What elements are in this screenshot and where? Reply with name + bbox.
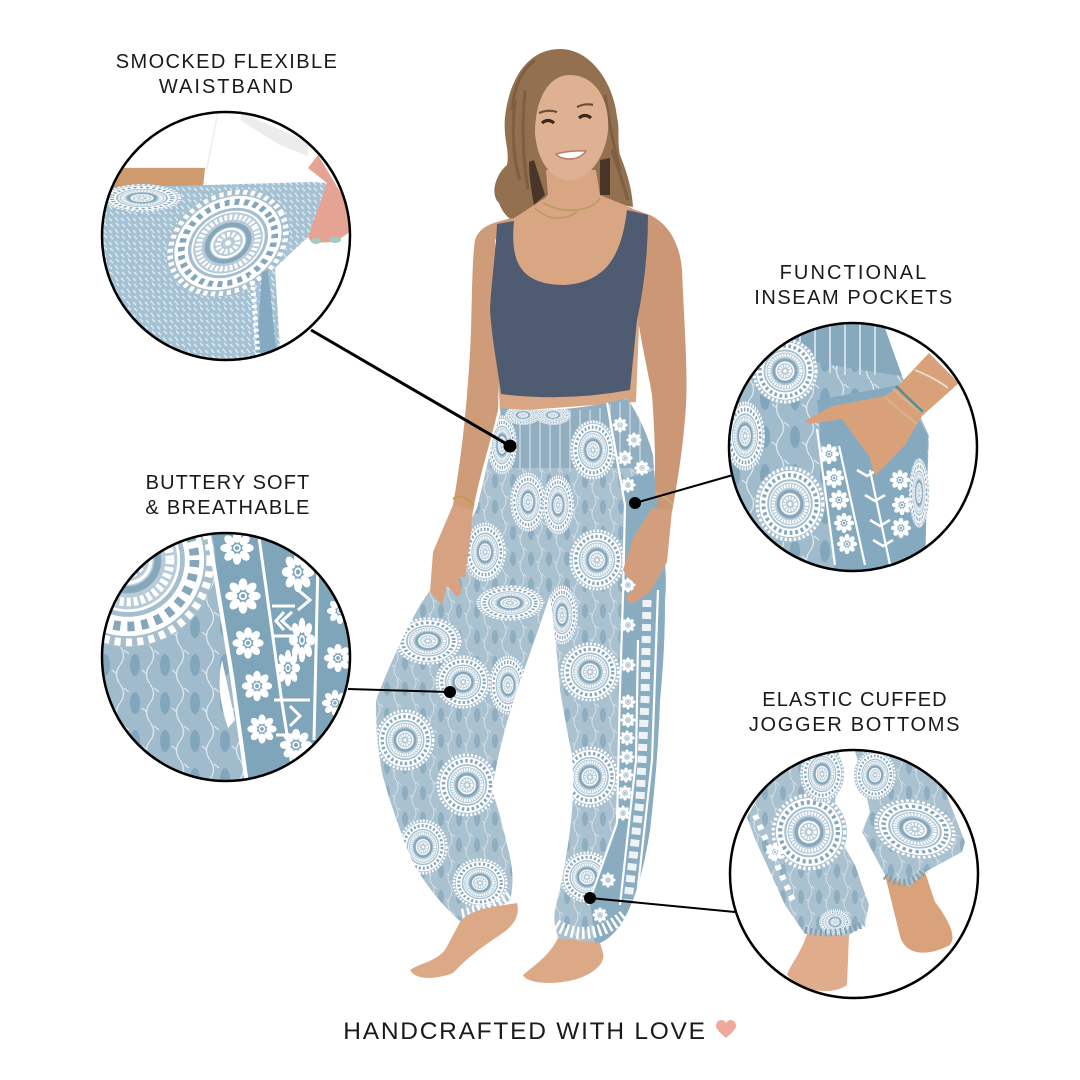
left foot bbox=[410, 903, 518, 978]
heading: buttery soft and breathable bbox=[145, 472, 311, 519]
left hand bbox=[430, 505, 473, 605]
heading: functional inseam pockets bbox=[754, 262, 954, 309]
right foot bbox=[523, 938, 603, 983]
heading: functional inseam pockets: FUNCTIONAL bbox=[780, 262, 928, 284]
waistband and hip mandalas bbox=[570, 420, 616, 480]
hair strands bbox=[512, 60, 628, 200]
model figure bbox=[375, 49, 687, 983]
heading: smocked flexible waistband: WAISTBAND bbox=[159, 76, 295, 98]
heading: smocked flexible waistband: SMOCKED FLEXIBLE bbox=[116, 51, 338, 73]
neck and chest skin bbox=[494, 170, 640, 412]
face bbox=[535, 75, 608, 180]
right bracelet bbox=[655, 492, 673, 505]
hair bbox=[494, 49, 633, 222]
callout: pockets detail bbox=[725, 320, 981, 575]
heading: buttery soft and breathable: BUTTERY SOFT bbox=[146, 472, 310, 494]
callout: cuff detail bbox=[728, 746, 982, 1002]
cuffs gathering bbox=[462, 895, 625, 933]
icon: heart bbox=[716, 1020, 736, 1038]
left bracelet bbox=[453, 497, 474, 505]
pointer: waistband bbox=[311, 330, 516, 452]
pointer: fabric bbox=[348, 686, 456, 698]
band fabric bbox=[817, 385, 928, 575]
right hand bbox=[623, 508, 672, 604]
hair shadow by neck bbox=[529, 158, 610, 205]
necklace bbox=[535, 198, 600, 218]
pants print bbox=[375, 400, 672, 945]
side band bbox=[590, 470, 672, 945]
pointer: cuffs bbox=[584, 892, 735, 912]
eyes bbox=[542, 116, 591, 123]
tagline: HANDCRAFTED WITH LOVE bbox=[343, 1018, 707, 1045]
heading: buttery soft and breathable: & BREATHABLE bbox=[145, 497, 311, 519]
heading: elastic cuffed jogger bottoms: JOGGER BOTTOMS bbox=[749, 714, 961, 736]
pointer: pockets bbox=[629, 475, 733, 509]
callout: waistband detail bbox=[100, 110, 354, 364]
pants bbox=[376, 398, 666, 943]
right arm bbox=[630, 208, 687, 512]
callout: fabric detail bbox=[100, 532, 352, 782]
heading: functional inseam pockets: INSEAM POCKETS bbox=[754, 287, 954, 309]
heading: elastic cuffed jogger bottoms: ELASTIC CUFFED bbox=[762, 689, 948, 711]
heading: smocked flexible waistband bbox=[116, 51, 338, 98]
tank top bbox=[490, 210, 648, 397]
smile bbox=[556, 151, 586, 159]
heading: elastic cuffed jogger bottoms bbox=[749, 689, 961, 736]
left arm bbox=[453, 218, 513, 512]
eyebrows bbox=[539, 104, 593, 113]
